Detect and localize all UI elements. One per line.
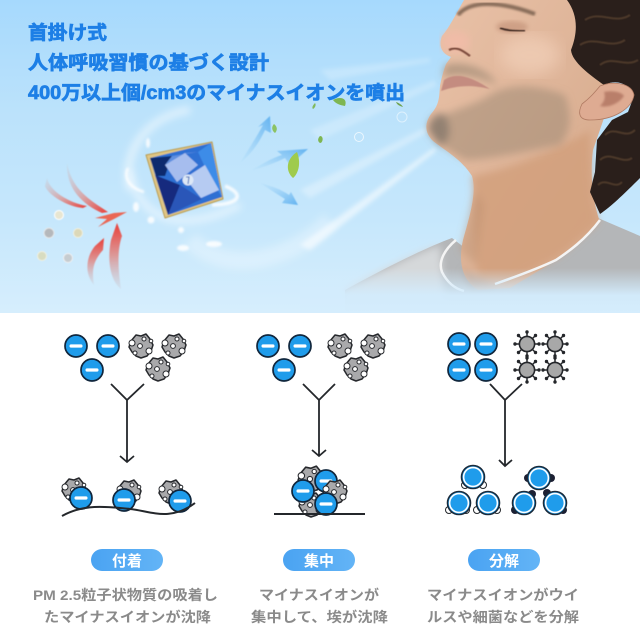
man: eyebrow <box>458 4 535 15</box>
caption: adhesion <box>33 587 218 625</box>
label pill: adhesion <box>91 549 163 571</box>
white air swirl <box>128 110 330 260</box>
man: neck shadow <box>460 130 598 292</box>
ground line <box>274 513 365 515</box>
negative ions <box>257 335 311 381</box>
dust particles <box>129 334 186 381</box>
sky background <box>0 0 640 313</box>
device gem facets <box>150 143 222 215</box>
leaves and bubbles <box>312 98 407 143</box>
merge arrow <box>303 384 335 456</box>
negative ions <box>448 333 497 381</box>
light rays toward chin <box>300 58 436 250</box>
blue clean air arrows <box>240 116 308 205</box>
ions with dark fragments <box>511 466 567 514</box>
merge arrow <box>111 384 144 462</box>
caption: adhesion: PM 2.5粒子状物質の吸着し <box>33 587 218 603</box>
caption: decomposition: マイナスイオンがウイ <box>427 587 579 603</box>
negative ions <box>65 335 119 381</box>
label pill: decomposition <box>468 549 540 571</box>
dust particles <box>328 334 385 381</box>
device gold frame <box>146 142 223 218</box>
panel: decomposition diagram <box>446 330 569 514</box>
headline line 2: 人体呼吸習慣の基づく設計 <box>28 51 269 74</box>
label pill: concentration: 集中 <box>304 552 334 570</box>
man: ear inner shadow <box>600 91 624 107</box>
caption: concentration: マイナスイオンが <box>259 587 379 603</box>
man: ear <box>580 83 634 120</box>
man: nose highlight <box>442 31 470 53</box>
red polluted air arrows <box>45 163 127 289</box>
ions with white fragments <box>446 466 500 514</box>
panel: concentration diagram <box>257 334 385 517</box>
label pill: adhesion: 付着 <box>112 552 142 570</box>
viruses <box>513 330 569 384</box>
man: upper face highlight <box>500 35 560 75</box>
headline text <box>28 21 405 104</box>
man: hair <box>567 0 640 214</box>
device logo <box>182 174 194 186</box>
headline line 1: 首掛け式 <box>28 21 107 44</box>
man: eye socket shadow <box>496 21 528 33</box>
man: t-shirt collar <box>441 220 600 291</box>
caption: concentration: 集中して、埃が沈降 <box>251 609 388 625</box>
man: lips <box>441 76 490 91</box>
headline line 3: 400万以上個/cm3のマイナスイオンを噴出 <box>28 82 405 104</box>
device gem face <box>150 143 222 215</box>
device: diamond air purifier <box>146 142 223 218</box>
label pill: concentration <box>283 549 355 571</box>
man: stubble <box>428 64 570 160</box>
white sparkles <box>133 138 222 251</box>
merge arrow <box>490 384 522 466</box>
fade at the bottom of photo <box>300 268 640 313</box>
clustered particles and ions <box>274 466 365 517</box>
caption: concentration <box>251 587 388 625</box>
hero photo panel <box>0 0 640 313</box>
caption: decomposition <box>427 587 579 625</box>
man: nostril <box>449 48 470 56</box>
particles stuck to the ions on a surface <box>62 478 195 516</box>
man: shirt <box>345 218 640 313</box>
airborne particles <box>38 210 82 262</box>
man: neck and face <box>426 0 612 290</box>
man: eye <box>500 28 525 31</box>
white swirl around device <box>126 168 237 205</box>
panel: adhesion diagram <box>62 334 195 516</box>
caption: adhesion: たマイナスイオンが沈降 <box>44 609 211 625</box>
device logo mark <box>186 177 189 184</box>
green leaves <box>272 124 299 178</box>
label pill: decomposition: 分解 <box>489 553 519 570</box>
caption: decomposition: ルスや細菌などを分解 <box>427 609 579 625</box>
